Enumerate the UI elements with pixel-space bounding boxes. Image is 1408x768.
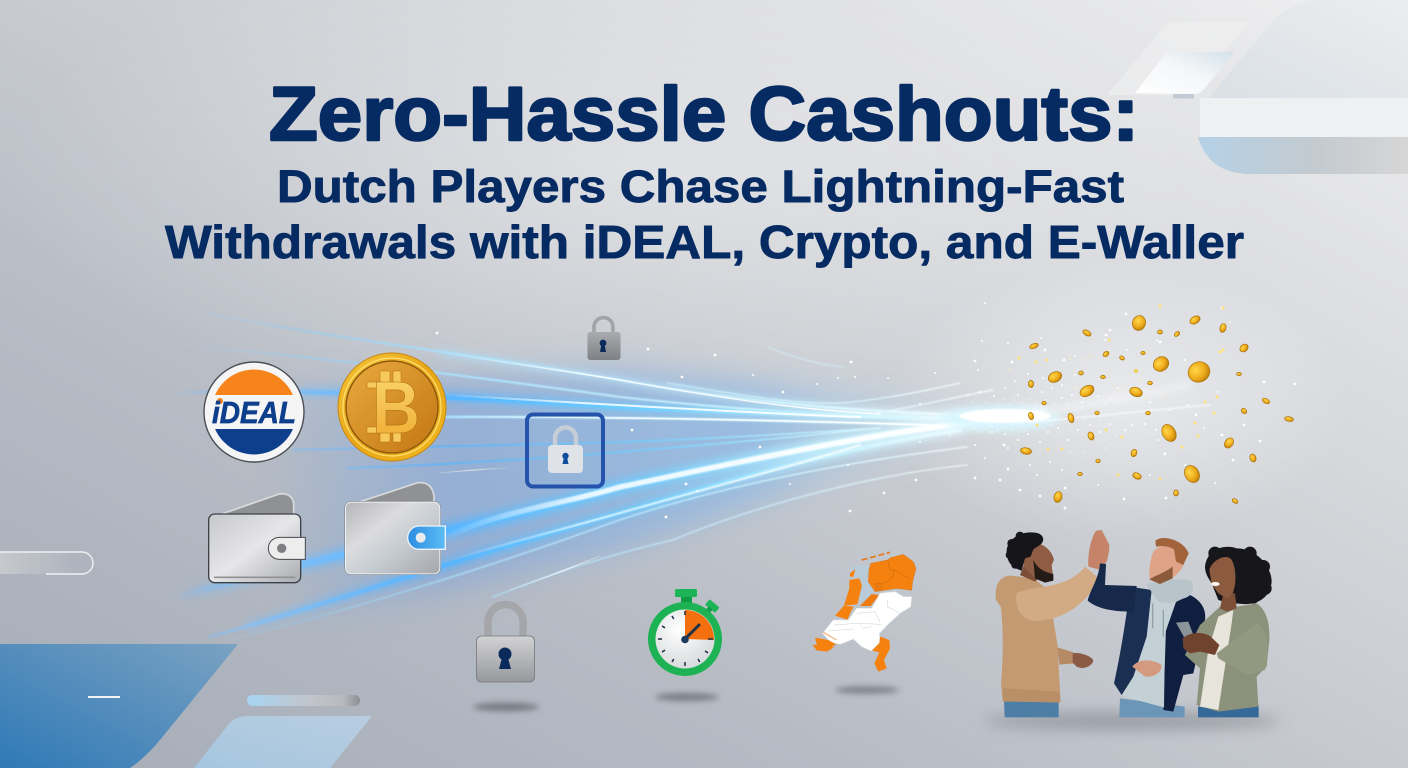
heading line 1: Zero-Hassle Cashouts: bbox=[269, 72, 1139, 157]
icon: stopwatch with shadow bbox=[648, 589, 722, 701]
heading line 3: Withdrawals with iDEAL, Crypto, and E-Waller bbox=[165, 216, 1244, 268]
title bbox=[165, 72, 1244, 268]
icon: bitcoin coin bbox=[338, 353, 446, 461]
woman in olive jacket bbox=[1176, 547, 1272, 717]
man in navy jacket bbox=[1088, 538, 1205, 717]
icon: Netherlands map with shadow bbox=[813, 552, 916, 694]
sparkle particles bbox=[437, 303, 1295, 567]
decorative shapes: top right bbox=[1107, 0, 1408, 174]
icon: small padlock bbox=[588, 318, 620, 360]
icon: silver wallet bbox=[209, 494, 305, 583]
icon: large padlock with shadow bbox=[473, 604, 539, 712]
decorative shapes: bottom left bbox=[0, 552, 372, 768]
ground shadow bbox=[984, 712, 1280, 730]
man in tan hoodie bbox=[996, 530, 1109, 717]
icon: bitcoin coin: B bbox=[372, 366, 420, 449]
icon: silver wallet with blue clasp bbox=[345, 483, 445, 575]
light streams converging to the coin burst bbox=[167, 313, 1210, 640]
icon: padlock in blue frame bbox=[527, 414, 603, 486]
gold coins burst bbox=[1020, 314, 1294, 504]
illustration: three friends high-fiving bbox=[984, 530, 1280, 730]
icon: iDEAL badge bbox=[204, 362, 304, 462]
heading line 2: Dutch Players Chase Lightning-Fast bbox=[277, 161, 1124, 212]
icon: iDEAL badge: iDEAL bbox=[212, 395, 296, 430]
